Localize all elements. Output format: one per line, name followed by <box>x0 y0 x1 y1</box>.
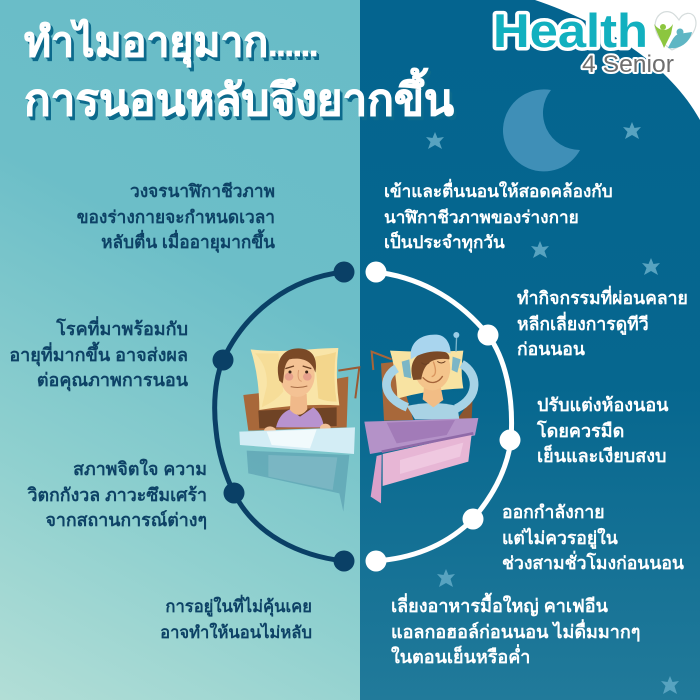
text: right block 1: เข้าและตื่นนอนให้สอดคล้องกับ <box>384 181 613 201</box>
text: right block 4: ช่วงสามชั่วโมงก่อนนอน <box>502 553 684 573</box>
right person: resting in bed <box>364 332 478 503</box>
icon: stars <box>426 122 679 694</box>
text: right block 5 <box>391 592 640 667</box>
text: left block 3: วิตกกังวล ภาวะซึมเศร้า <box>28 484 207 504</box>
panel: right background <box>360 0 700 700</box>
text: right block 5: ในตอนเย็นหรือค่ำ <box>391 647 530 667</box>
text: right block 3: ปรับแต่งห้องนอน <box>537 395 668 415</box>
text: right block 4 <box>502 502 684 573</box>
text: left block 4: อาจทำให้นอนไม่หลับ <box>160 622 312 642</box>
text: left block 1 <box>77 181 275 253</box>
title: ทำไมอายุมาก...... <box>24 19 317 65</box>
text: right block 2: ทำกิจกรรมที่ผ่อนคลาย <box>517 288 688 308</box>
text: right block 2 <box>517 286 688 359</box>
text: right block 3: เย็นและเงียบสงบ <box>537 446 666 466</box>
text: right block 1 <box>384 178 613 253</box>
left arc with nodes <box>212 262 354 572</box>
text: right block 4: ออกกำลังกาย <box>502 502 605 522</box>
text: right block 2: ก่อนนอน <box>517 339 585 359</box>
logo: Health 4 Senior: Health <box>493 4 648 57</box>
text: left block 4: การอยู่ในที่ไม่คุ้นเคย <box>165 597 312 616</box>
text: right block 3 <box>536 395 668 466</box>
text: right block 1: นาฬิกาชีวภาพของร่างกาย <box>384 206 579 226</box>
panel: left background <box>0 0 360 700</box>
text: left block 1: หลับตื่น เมื่ออายุมากขึ้น <box>101 232 275 252</box>
text: left block 3: สภาพจิตใจ ความ <box>73 459 207 479</box>
left person: awake in bed <box>239 348 359 512</box>
text: left block 2: อายุที่มากขึ้น อาจส่งผล <box>9 344 188 364</box>
text: right block 2: หลีกเลี่ยงการดูทีวี <box>517 314 649 334</box>
right arc with nodes <box>366 262 520 572</box>
text: right block 5: แอลกอฮอล์ก่อนนอน ไม่ดื่มมากๆ <box>391 622 640 642</box>
text: right block 5: เลี่ยงอาหารมื้อใหญ่ คาเฟอีน <box>391 596 608 616</box>
logo: Health 4 Senior: 4 Senior <box>582 51 674 78</box>
text: left block 2: ต่อคุณภาพการนอน <box>37 370 188 390</box>
text: left block 3 <box>27 458 207 530</box>
text: right block 1: เป็นประจำทุกวัน <box>384 232 505 252</box>
title <box>24 18 454 125</box>
text: right block 4: แต่ไม่ควรอยู่ใน <box>502 528 618 548</box>
text: left block 1: วงจรนาฬิกาชีวภาพ <box>130 181 275 201</box>
text: left block 3: จากสถานการณ์ต่างๆ <box>46 510 207 530</box>
text: left block 4 <box>160 594 312 642</box>
icon: crescent moon <box>503 89 580 171</box>
text: left block 2: โรคที่มาพร้อมกับ <box>56 319 188 339</box>
text: left block 1: ของร่างกายจะกำหนดเวลา <box>77 206 275 226</box>
text: left block 2 <box>9 316 188 392</box>
text: right block 3: โดยควรมืด <box>537 420 624 440</box>
title: การนอนหลับจึงยากขึ้น <box>24 76 454 125</box>
white corner behind logo <box>535 0 700 120</box>
